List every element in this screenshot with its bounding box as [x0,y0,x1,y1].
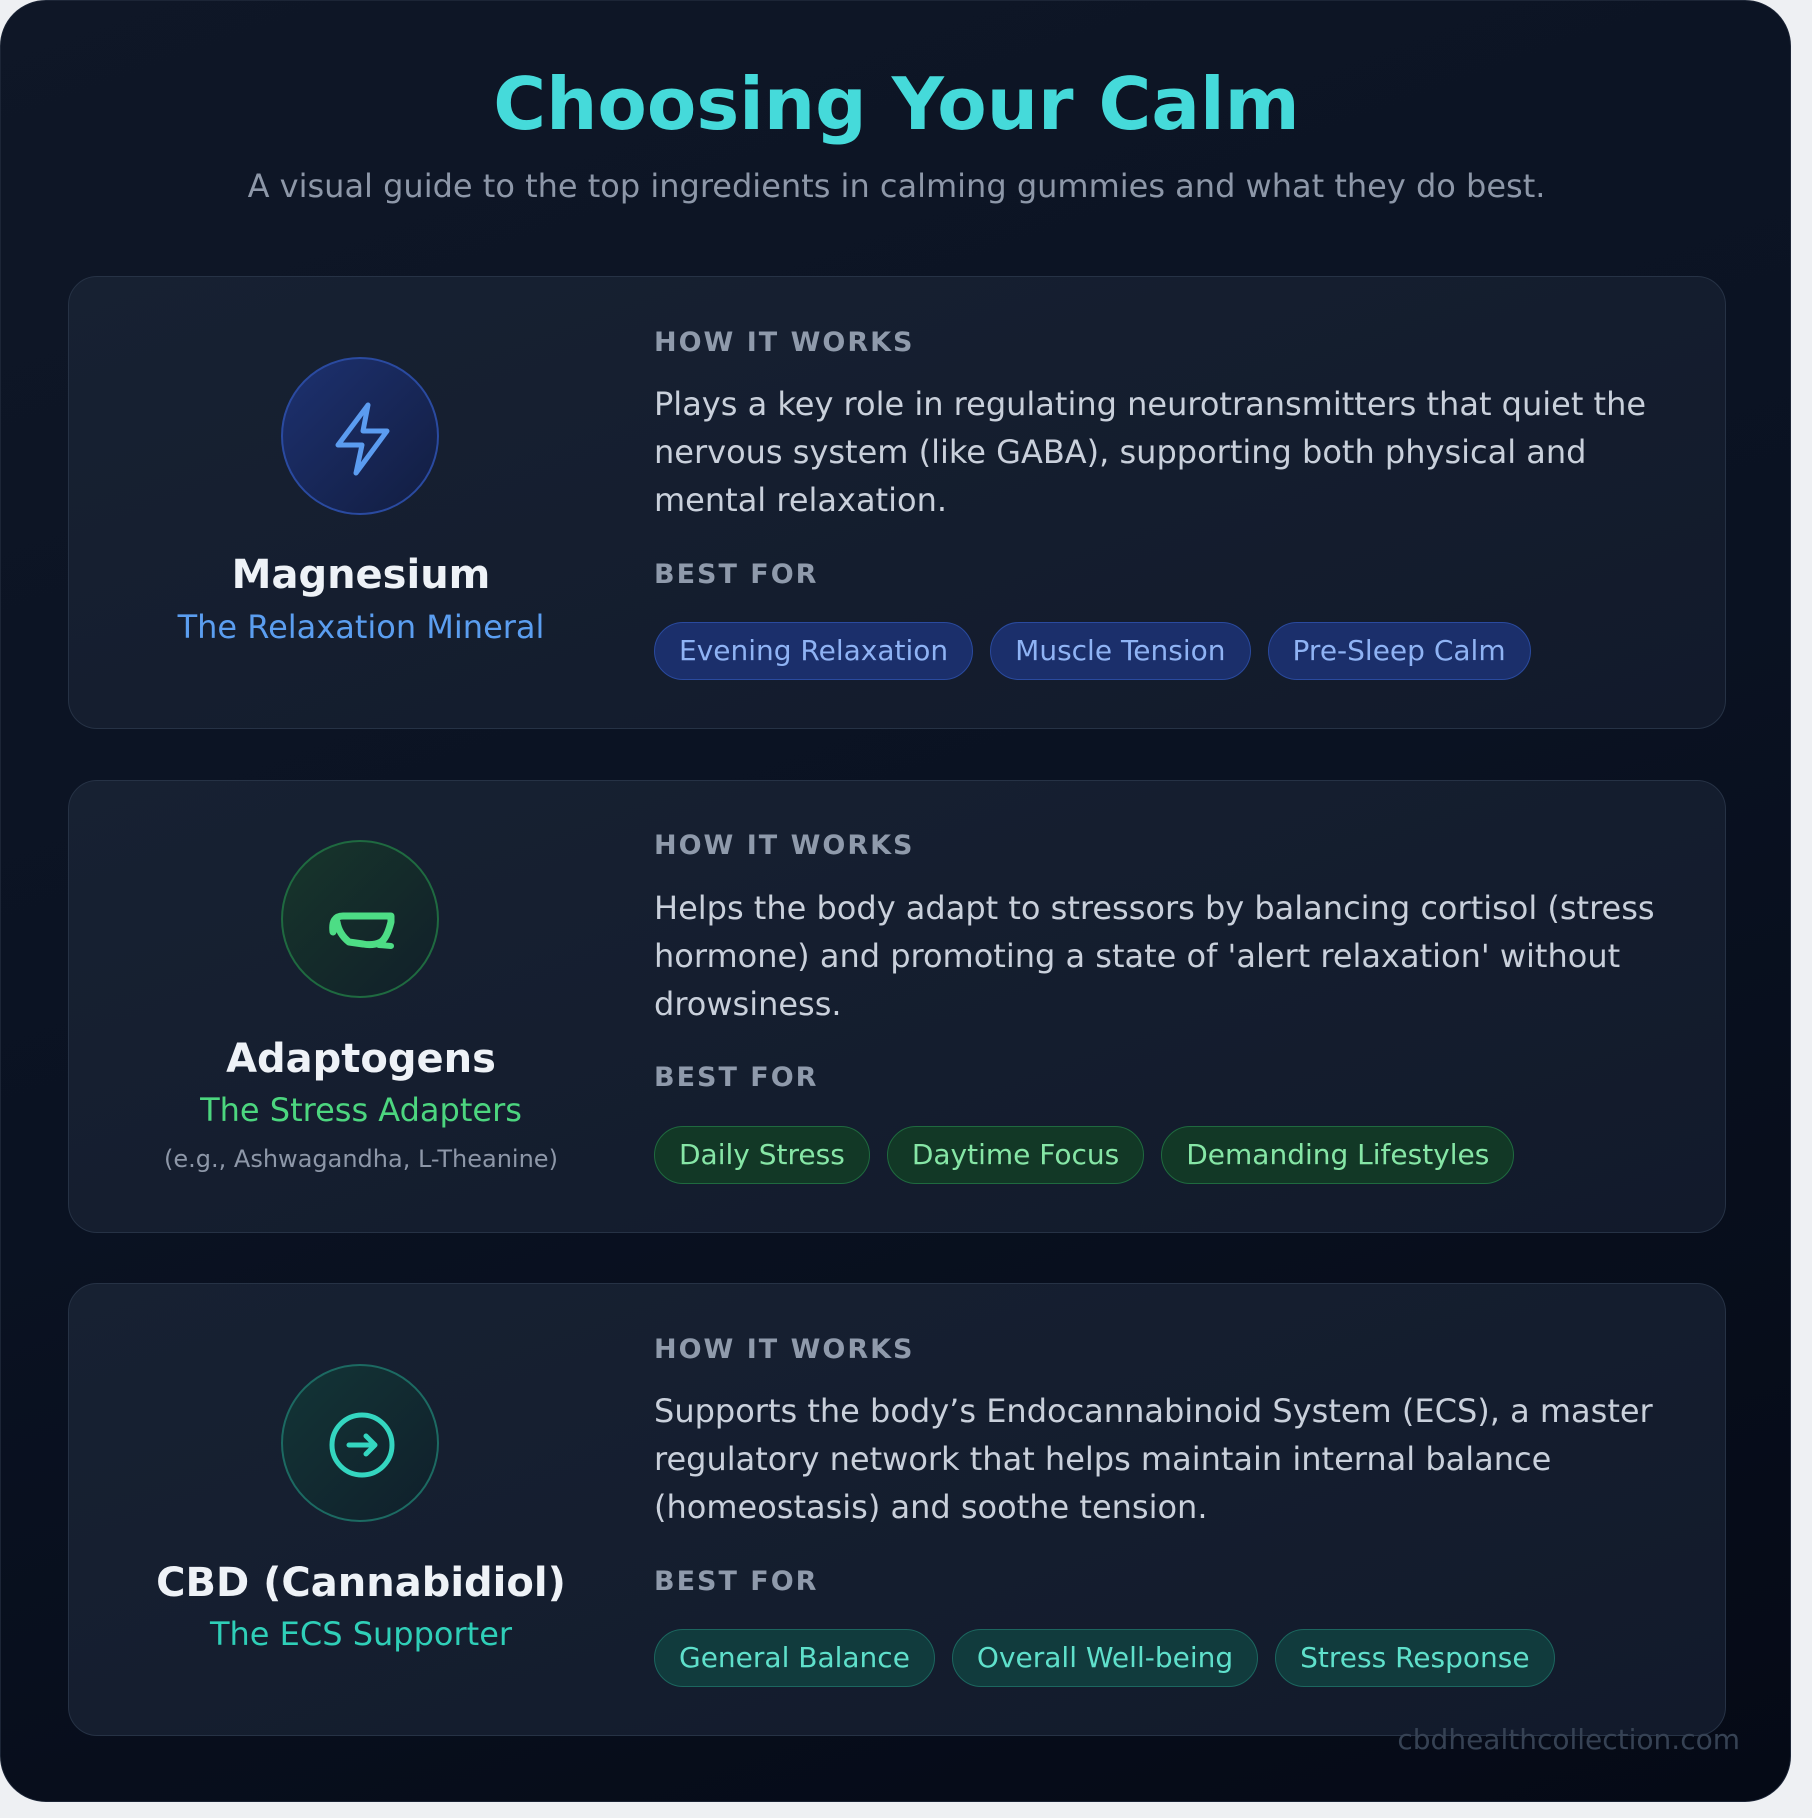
label: best for: BEST FOR [654,1062,818,1093]
panel: magnesium [68,276,1726,729]
panel: adaptogens [68,780,1726,1233]
label: how it works: HOW IT WORKS [654,1334,914,1365]
description: Helps the body adapt to stressors by balancing cortisol (stress hormone) and promoting a state of 'alert relaxation' without drowsiness. [654,889,1655,1023]
description: Supports the body’s Endocannabinoid System (ECS), a master regulatory network that helps maintain internal balance (homeostasis) and soothe tension. [654,1392,1653,1526]
icon: lightning [281,357,439,515]
tags: Pre-Sleep Calm [1293,634,1506,667]
examples: (e.g., Ashwagandha, L-Theanine) [164,1145,558,1173]
label: how it works: HOW IT WORKS [654,327,914,358]
panel: cbd [68,1283,1726,1736]
tags: General Balance [679,1641,910,1674]
name: Magnesium [232,552,490,598]
subtitle: The Stress Adapters [200,1091,522,1129]
label: how it works: HOW IT WORKS [654,830,914,861]
tags [654,622,1531,680]
tags: Evening Relaxation [679,634,948,667]
watermark: cbdhealthcollection.com [1397,1723,1740,1756]
tags: Stress Response [1300,1641,1530,1674]
name: Adaptogens [226,1036,496,1082]
tags: Demanding Lifestyles [1186,1138,1489,1171]
tags: Muscle Tension [1015,634,1226,667]
subtitle: The ECS Supporter [210,1615,512,1653]
tags [654,1629,1555,1687]
title: Choosing Your Calm [493,62,1300,146]
label: best for: BEST FOR [654,1566,818,1597]
subtitle: A visual guide to the top ingredients in calming gummies and what they do best. [248,167,1545,205]
icon: cup [281,840,439,998]
tags [654,1126,1514,1184]
name: CBD (Cannabidiol) [156,1560,566,1606]
description: Plays a key role in regulating neurotransmitters that quiet the nervous system (like GABA), supporting both physical and mental relaxation. [654,385,1646,519]
subtitle: The Relaxation Mineral [178,608,544,646]
icon: arrow circle [281,1364,439,1522]
tags: Daily Stress [679,1138,845,1171]
tags: Overall Well-being [977,1641,1233,1674]
tags: Daytime Focus [912,1138,1119,1171]
label: best for: BEST FOR [654,559,818,590]
